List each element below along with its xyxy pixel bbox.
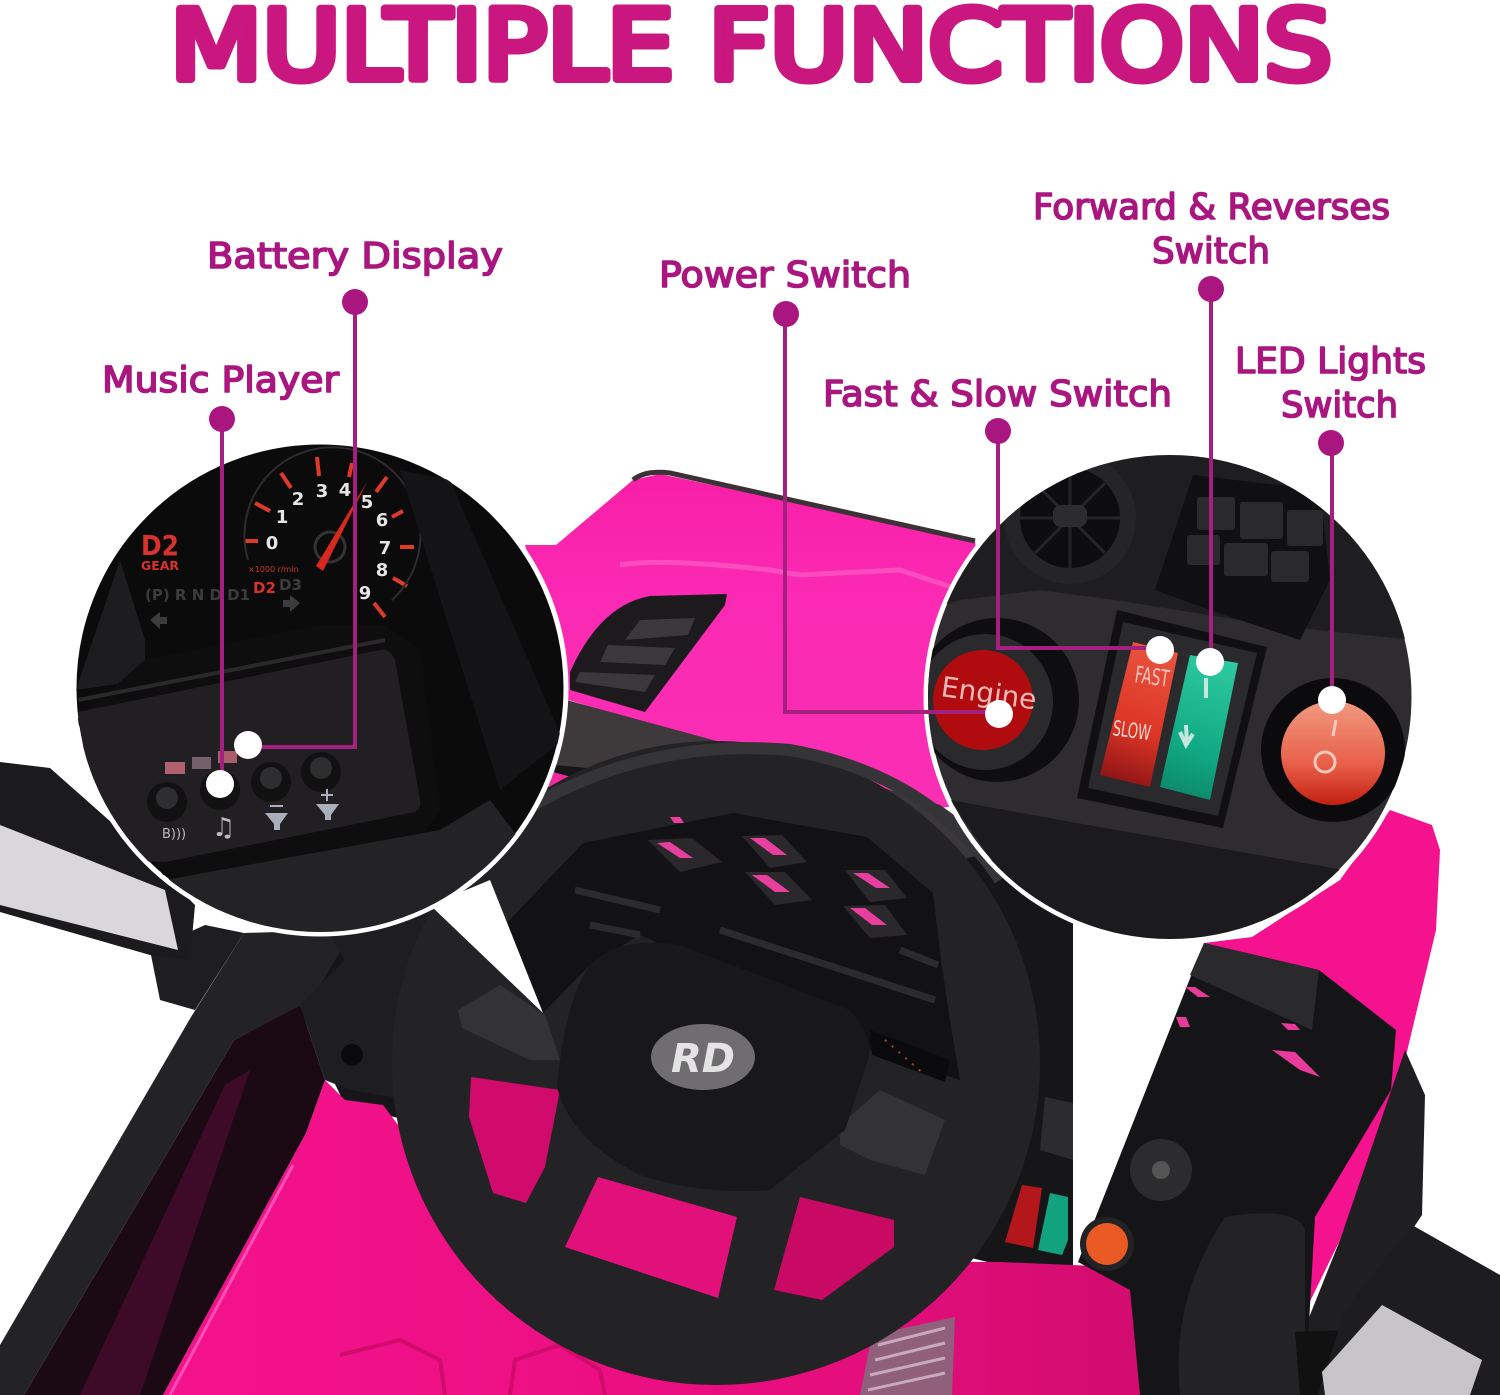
floor hexagon relief	[340, 1340, 605, 1395]
right zoom circle	[915, 452, 1414, 945]
toy car cockpit illustration	[0, 472, 1500, 1395]
gear label: D2	[141, 529, 179, 562]
bottom pink window	[565, 1177, 737, 1298]
hood vent	[570, 594, 727, 712]
gear selector row: (P) R N D D1	[145, 586, 250, 604]
gear selector row: D2	[253, 579, 276, 597]
LED rocker	[1281, 701, 1385, 805]
left textured trim	[76, 560, 145, 690]
right tyre	[1300, 1050, 1425, 1340]
right pink body column	[1204, 810, 1440, 1332]
plate inner	[1088, 622, 1257, 816]
volume down icon	[265, 805, 288, 830]
gauge numbers: 6	[376, 510, 388, 531]
callout: Music Player	[102, 360, 339, 798]
red fast slow rocker	[1100, 642, 1178, 787]
gear selector row: D3	[279, 576, 302, 594]
right pink window	[774, 1197, 894, 1300]
right dash upper block	[1190, 943, 1319, 1030]
right grille pink gaps	[1176, 987, 1320, 1077]
callout: Forward and Reverses Switch	[1033, 187, 1390, 676]
air vent	[1004, 464, 1120, 568]
rpm label: ×1000 r/min	[248, 565, 299, 574]
display hood	[78, 660, 164, 875]
switch plate	[1077, 610, 1267, 828]
callout: Battery Display: Battery Display	[207, 236, 503, 277]
callout: Fast and Slow Switch	[823, 374, 1174, 664]
left mirror base	[150, 925, 244, 1010]
steering wheel	[392, 741, 1040, 1385]
gauge numbers: 1	[276, 507, 288, 528]
volume up icon	[316, 789, 339, 820]
lower trim	[165, 800, 520, 935]
gauge needle	[316, 482, 367, 571]
button cluster surround	[1155, 475, 1330, 640]
rim highlight	[480, 748, 1000, 880]
dash side dark	[300, 905, 430, 1100]
right spoke buttons	[840, 1090, 945, 1175]
gauge hub	[315, 532, 345, 562]
battery LEDs	[165, 751, 237, 774]
right side shadow wedge	[400, 470, 563, 790]
callout: Battery Display	[207, 236, 503, 759]
upper dash	[928, 455, 1413, 640]
left spoke buttons	[458, 985, 560, 1060]
dashboard grey strip right	[840, 775, 1000, 860]
hood top edge	[633, 472, 975, 541]
mini gauge	[870, 1030, 950, 1082]
gear selector row	[146, 579, 301, 602]
small dash switches	[1005, 1185, 1068, 1255]
wheel body	[392, 741, 1040, 1385]
dashboard grey strip	[555, 700, 720, 770]
column foot	[1295, 1330, 1345, 1395]
bluetooth label: B)))	[162, 827, 186, 842]
gauge numbers: 2	[292, 489, 304, 510]
hood	[525, 474, 1000, 808]
pedal	[860, 1317, 955, 1395]
door sill maroon band	[80, 1070, 250, 1395]
LED rocker housing	[1261, 678, 1405, 822]
direction arrows	[150, 595, 300, 629]
dash column	[1178, 1213, 1305, 1395]
right dash section	[1078, 943, 1396, 1395]
callout: LED Lights Switch: Switch	[1281, 385, 1398, 426]
door frame	[0, 930, 344, 1395]
floor highlight	[170, 1165, 293, 1395]
small speaker vent	[1130, 1139, 1192, 1201]
left side mirror	[0, 762, 195, 960]
callout: Music Player: Music Player	[102, 360, 339, 401]
gauge numbers	[266, 480, 391, 604]
gauge arc	[244, 447, 420, 600]
pink grille gaps in wheel opening	[657, 817, 890, 925]
cluster tiles	[1187, 497, 1323, 582]
red fast slow rocker: FAST	[1133, 661, 1171, 693]
dash button block	[1040, 1097, 1073, 1160]
pink floor	[163, 1080, 1190, 1395]
callout: LED Lights Switch: LED Lights	[1235, 341, 1426, 382]
grille tiles in wheel opening	[648, 835, 907, 938]
right mirror	[1318, 1225, 1500, 1395]
mirror glass	[0, 825, 178, 950]
music icon: ♫	[212, 813, 235, 843]
gauge numbers: 5	[361, 492, 373, 513]
callout: Power Switch	[659, 255, 1013, 728]
top opening	[488, 813, 960, 1080]
hood crease highlight	[620, 562, 960, 590]
gauge numbers: 3	[316, 481, 328, 502]
gauge numbers: 7	[379, 538, 391, 559]
mount bolt	[341, 1044, 363, 1066]
small LED switch	[1080, 1217, 1134, 1271]
gauge numbers: 9	[359, 583, 371, 604]
callout: Fast and Slow Switch: Fast & Slow Switch	[823, 374, 1172, 415]
button panel	[78, 650, 420, 862]
red fast slow rocker: SLOW	[1111, 717, 1152, 746]
small pink gap by left circle	[545, 772, 575, 790]
callout: LED Lights Switch	[1235, 341, 1426, 714]
button highlights	[156, 757, 332, 809]
RD badge	[651, 1024, 755, 1090]
engine button	[933, 650, 1039, 750]
RD badge: RD	[671, 1036, 735, 1082]
green direction rocker	[1160, 655, 1238, 800]
callout: Forward and Reverses Switch: Switch	[1152, 231, 1270, 272]
callout: Power Switch: Power Switch	[659, 255, 911, 296]
gauge numbers: 8	[376, 560, 388, 581]
gauge tick marks	[245, 457, 414, 617]
left pink window	[469, 1077, 560, 1203]
airbag pad	[557, 942, 870, 1191]
left speech pointer	[430, 880, 543, 1013]
callout: Forward and Reverses Switch: Forward & Reverses	[1033, 187, 1390, 228]
control buttons	[147, 752, 341, 822]
engine button: Engine	[939, 670, 1039, 716]
door sill shadow	[24, 1005, 325, 1395]
gauge numbers: 0	[266, 533, 278, 554]
panel top rim	[78, 640, 385, 700]
right speech pointer	[1073, 915, 1204, 1263]
grille slats in wheel opening	[575, 890, 938, 1000]
gear label	[142, 534, 179, 570]
gear label: GEAR	[141, 559, 179, 573]
engine button housing	[915, 618, 1079, 782]
dashboard base	[300, 700, 1073, 1265]
lower dash band	[951, 800, 1340, 939]
left zoom circle	[74, 442, 566, 935]
gauge numbers: 4	[339, 480, 351, 501]
right mirror glass	[1322, 1305, 1482, 1395]
